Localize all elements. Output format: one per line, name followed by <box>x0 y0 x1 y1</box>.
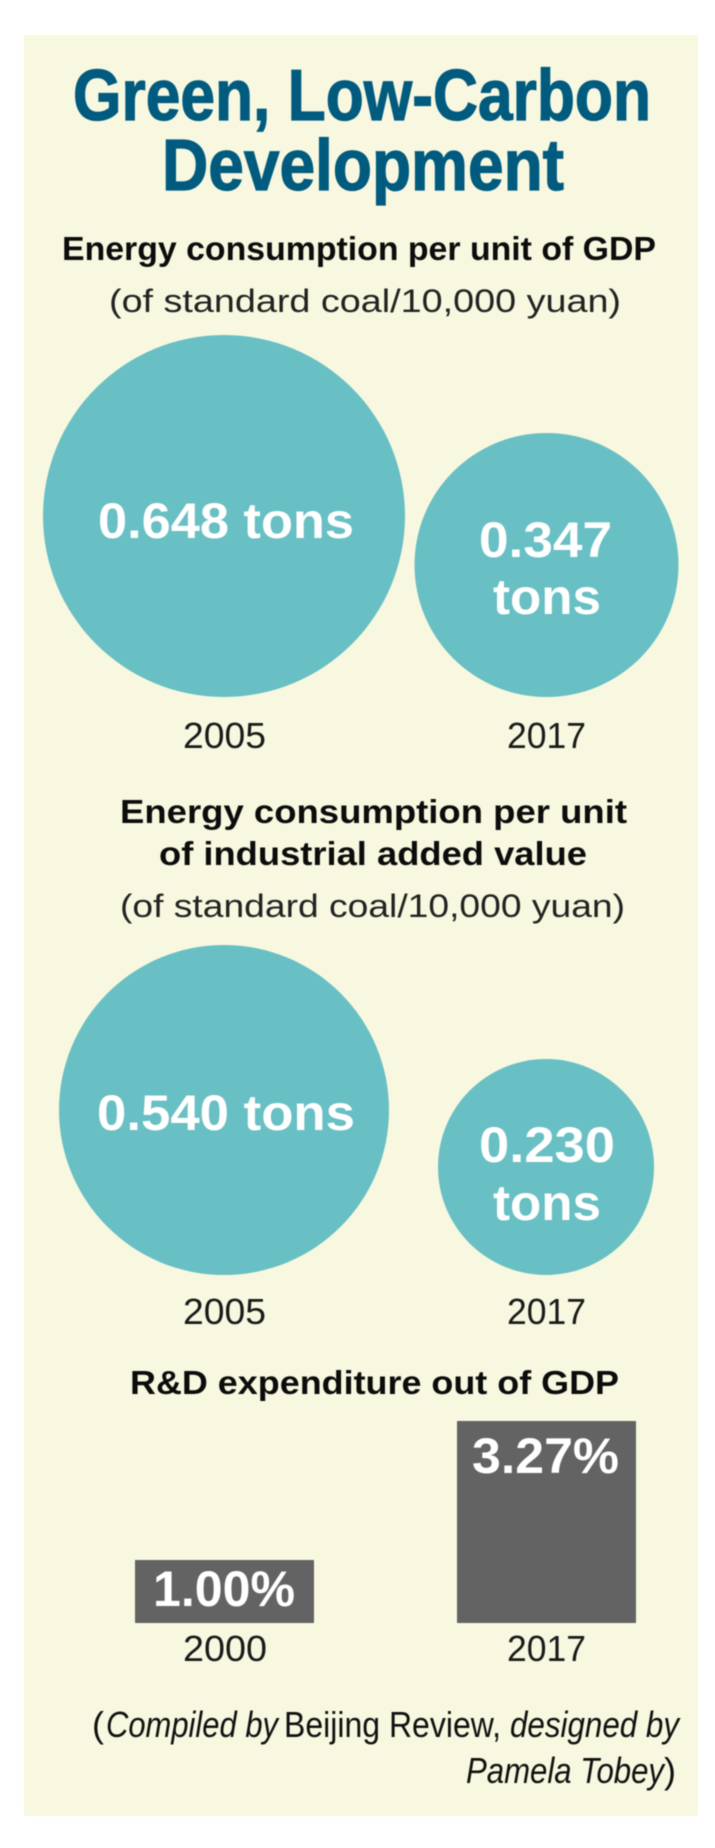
circle 2005 <box>59 945 389 1275</box>
year label 2017: 2017 <box>507 715 586 756</box>
circle 2017: tons <box>493 569 601 625</box>
bar 2017 <box>457 1421 636 1623</box>
unit note: (of standard coal/10,000 yuan) <box>120 888 625 924</box>
section: R&D expenditure <box>130 1364 636 1669</box>
year label 2005: 2005 <box>183 715 266 756</box>
bar 2000: 1.00% <box>153 1561 295 1617</box>
year label 2005: 2005 <box>183 1291 266 1332</box>
bar 2017: 3.27% <box>472 1428 619 1484</box>
unit note: (of standard coal/10,000 yuan) <box>109 283 621 319</box>
year label 2000: 2000 <box>183 1628 267 1669</box>
credit line: Beijing Review, <box>284 1704 501 1745</box>
circle 2005 <box>43 335 405 697</box>
title <box>73 56 651 206</box>
heading: Energy consumption per unit <box>120 793 627 830</box>
credit line: ) <box>664 1750 676 1791</box>
heading: Energy consumption per unit of GDP <box>62 230 656 267</box>
credit line: designed by <box>510 1704 681 1745</box>
credit line: ( <box>92 1704 104 1745</box>
circle 2017 <box>438 1059 654 1275</box>
heading <box>120 793 627 872</box>
circle 2005: 0.540 tons <box>97 1085 355 1141</box>
circle 2017: tons <box>493 1175 601 1231</box>
circle 2005: 0.648 tons <box>98 493 354 549</box>
heading: of industrial added value <box>159 835 587 872</box>
title: Development <box>162 126 564 206</box>
credit line <box>92 1704 681 1791</box>
heading: R&D expenditure out of GDP <box>130 1364 619 1401</box>
section: energy consumption per unit of industrial added value <box>59 793 654 1332</box>
circle 2017: 0.230 <box>479 1117 615 1173</box>
section: energy consumption per unit of GDP <box>43 230 678 756</box>
circle 2017: 0.347 <box>479 512 612 568</box>
circle 2017 <box>414 433 678 697</box>
credit line: Compiled by <box>106 1704 280 1745</box>
year label 2017: 2017 <box>507 1291 586 1332</box>
year label 2017: 2017 <box>507 1628 586 1669</box>
credit line: Pamela Tobey <box>466 1750 666 1791</box>
